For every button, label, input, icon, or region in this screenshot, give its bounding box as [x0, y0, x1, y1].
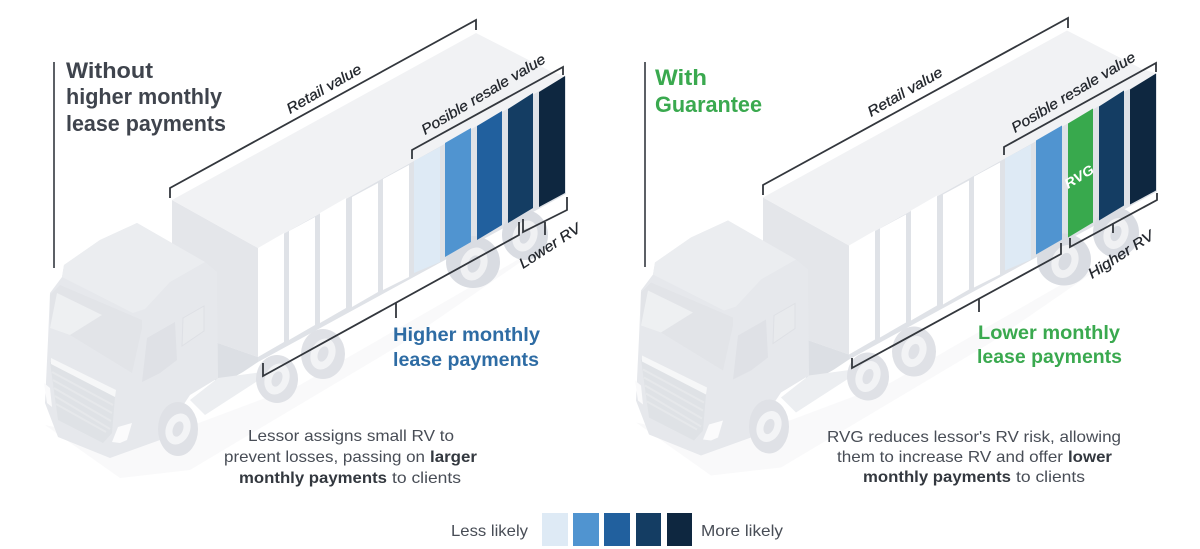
- label: retail value right: Retail value: [865, 65, 946, 120]
- description right: them to increase RV and offer: [837, 449, 1064, 466]
- value bands left: [414, 76, 565, 273]
- description right: lower: [1068, 449, 1112, 466]
- heading left: lease payments: [66, 111, 226, 136]
- description right: to clients: [1016, 469, 1085, 486]
- description left: Lessor assigns small RV to: [248, 428, 454, 445]
- callout: higher payments: [393, 324, 540, 371]
- bracket: retail value: [170, 20, 476, 198]
- heading left: Without: [66, 58, 154, 83]
- bracket: monthly payments: [263, 222, 519, 376]
- label: resale value: Posible resale value: [419, 52, 549, 138]
- panel: with guarantee: [635, 18, 1158, 486]
- legend: More likely: [701, 523, 783, 540]
- vertical rule right: [644, 62, 646, 267]
- vertical rule left: [53, 62, 55, 268]
- label: resale value right: Posible resale value: [1009, 50, 1139, 136]
- label: lower RV: Lower RV: [516, 220, 585, 272]
- heading right: With: [655, 65, 707, 90]
- bracket: resale value right: [1004, 63, 1156, 155]
- callout: lower payments: [977, 322, 1122, 368]
- label: retail value: Retail value: [284, 62, 365, 117]
- bracket: lower RV: [523, 197, 567, 235]
- icon: truck right: [635, 30, 1157, 476]
- description left: monthly payments: [239, 470, 387, 487]
- description right: [827, 429, 1121, 486]
- description left: to clients: [392, 470, 461, 487]
- bracket: higher RV: [1070, 193, 1157, 247]
- bracket: monthly payments right: [852, 243, 1061, 368]
- heading left: higher monthly: [66, 84, 223, 109]
- icon: truck left: [44, 33, 566, 478]
- label: RVG: RVG: [1062, 162, 1097, 192]
- value bands right: [1005, 74, 1156, 270]
- bracket: retail value right: [763, 18, 1068, 195]
- description left: prevent losses, passing on: [224, 449, 425, 466]
- callout: higher payments: Higher monthly: [393, 324, 540, 346]
- panel: without guarantee: [44, 20, 585, 487]
- heading right: Guarantee: [655, 92, 762, 117]
- heading left: [66, 58, 226, 136]
- description right: monthly payments: [863, 469, 1011, 486]
- callout: lower payments: Lower monthly: [978, 322, 1120, 344]
- heading right: [655, 65, 762, 117]
- callout: lower payments: lease payments: [977, 346, 1122, 368]
- callout: higher payments: lease payments: [393, 349, 539, 371]
- label: higher RV: Higher RV: [1085, 227, 1158, 282]
- legend: [451, 513, 783, 546]
- description left: larger: [430, 449, 477, 466]
- description left: [224, 428, 477, 487]
- bracket: resale value: [412, 67, 563, 159]
- legend: Less likely: [451, 523, 528, 540]
- description right: RVG reduces lessor's RV risk, allowing: [827, 429, 1121, 446]
